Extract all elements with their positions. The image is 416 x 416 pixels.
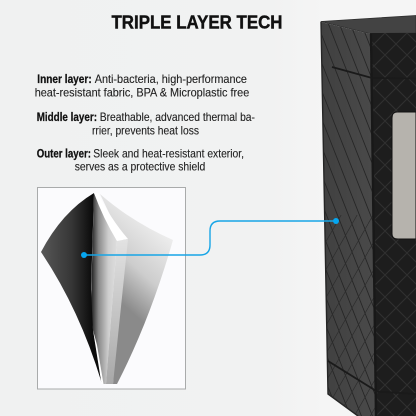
box side face bbox=[321, 22, 376, 416]
lid seam bbox=[332, 67, 416, 78]
text block: middle layer bbox=[37, 110, 255, 137]
icon: middle fold bbox=[91, 193, 117, 384]
panel: material layers sample bbox=[38, 188, 186, 389]
title: TRIPLE LAYER TECH bbox=[112, 11, 282, 32]
box window bbox=[392, 112, 416, 239]
text block: outer layer: serves as a protective shield bbox=[75, 160, 205, 174]
text block: inner layer: Inner layer: bbox=[37, 72, 92, 86]
text block: middle layer: rrier, prevents heat loss bbox=[92, 123, 199, 137]
box top face bbox=[321, 16, 416, 34]
text block: inner layer bbox=[35, 72, 250, 100]
connector line with end dots bbox=[81, 218, 339, 258]
text block: outer layer: Outer layer: bbox=[37, 147, 91, 161]
icon: cut edge strip bbox=[106, 239, 128, 384]
bottom seam bbox=[328, 361, 416, 394]
text block: outer layer bbox=[37, 147, 244, 174]
product: black box bbox=[321, 16, 416, 416]
icon: white fold strip bbox=[94, 193, 128, 241]
icon: dark inner leaf bbox=[41, 193, 102, 384]
text block: middle layer: Middle layer: bbox=[37, 110, 97, 124]
text block: outer layer: Sleek and heat-resistant exterior, bbox=[93, 147, 244, 161]
box front face bbox=[370, 33, 416, 416]
text block: middle layer: Breathable, advanced thermal ba- bbox=[100, 110, 255, 124]
icon: white lower sliver bbox=[93, 330, 104, 384]
text block: inner layer: heat-resistant fabric, BPA & Microplastic free bbox=[35, 86, 250, 100]
text block: inner layer: Anti-bacteria, high-performance bbox=[95, 72, 247, 86]
icon: light outer fold bbox=[100, 194, 173, 384]
